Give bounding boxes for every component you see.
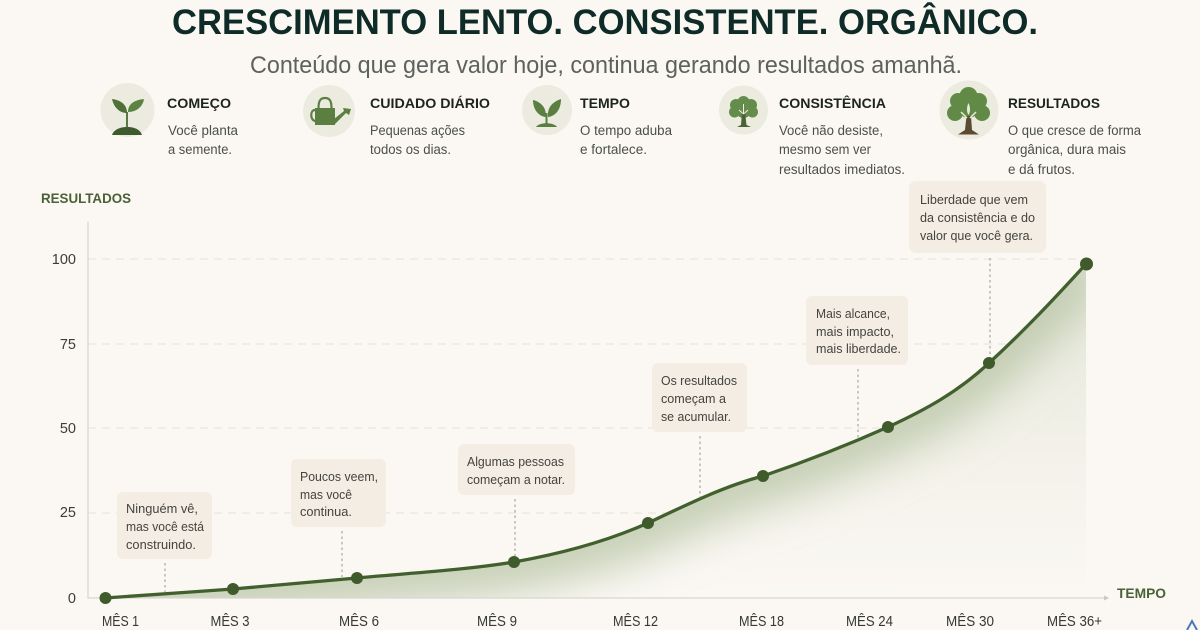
text: resultados: e dá frutos. bbox=[1008, 162, 1075, 177]
step: resultados bbox=[940, 80, 1141, 177]
x axis labels: MÊS 18 bbox=[739, 613, 784, 630]
y axis values: 75 bbox=[60, 337, 76, 353]
callout: month 9 bbox=[458, 444, 575, 495]
text: consistência bbox=[779, 123, 905, 177]
callout: month 24: Mais alcance, bbox=[816, 306, 890, 321]
y axis values: 25 bbox=[60, 505, 76, 521]
text: cuidado diário bbox=[370, 123, 465, 157]
text: resultados: orgânica, dura mais bbox=[1008, 142, 1126, 157]
callout: month 6: Poucos veem, bbox=[300, 469, 378, 484]
icon: watering can bbox=[303, 85, 355, 137]
callout: month 24: mais impacto, bbox=[816, 324, 894, 339]
callout: month 30: valor que você gera. bbox=[920, 228, 1033, 243]
text: resultados: O que cresce de forma bbox=[1008, 123, 1141, 138]
callout: month 30: da consistência e do bbox=[920, 210, 1035, 225]
icon: young plant bbox=[522, 85, 572, 135]
step: cuidado diário bbox=[303, 85, 490, 157]
callout: month 6: mas você bbox=[300, 487, 352, 502]
callout: month 30 bbox=[909, 181, 1046, 253]
heading: tempo: TEMPO bbox=[580, 95, 630, 111]
x axis labels: MÊS 1 bbox=[102, 613, 139, 630]
subtitle: Conteúdo que gera valor hoje, continua gerando resultados amanhã. bbox=[250, 52, 962, 79]
text: tempo bbox=[580, 123, 672, 157]
heading: resultados: RESULTADOS bbox=[1008, 95, 1100, 111]
heading: começo: COMEÇO bbox=[167, 95, 231, 111]
text: tempo: O tempo aduba bbox=[580, 123, 672, 138]
corner mark bbox=[1187, 621, 1197, 630]
step: consistência bbox=[719, 86, 905, 177]
text: consistência: Você não desiste, bbox=[779, 123, 883, 138]
heading: cuidado diário: CUIDADO DIÁRIO bbox=[370, 95, 490, 111]
text: cuidado diário: Pequenas ações bbox=[370, 123, 465, 138]
y axis values: 100 bbox=[52, 252, 76, 268]
text: começo: Você planta bbox=[168, 123, 238, 138]
callout: month 9: Algumas pessoas bbox=[467, 454, 564, 469]
text: começo bbox=[168, 123, 238, 157]
x axis labels bbox=[102, 613, 1102, 630]
callout: month 12 bbox=[652, 363, 747, 432]
callout: month 24 bbox=[806, 296, 908, 365]
x axis labels: MÊS 3 bbox=[210, 613, 250, 630]
text: tempo: e fortalece. bbox=[580, 142, 647, 157]
callout: month 1: Ninguém vê, bbox=[126, 501, 198, 516]
data points bbox=[100, 258, 1093, 604]
callout: month 9: começam a notar. bbox=[467, 472, 565, 487]
callout: month 6: continua. bbox=[300, 504, 352, 519]
x axis title: TEMPO bbox=[1117, 585, 1166, 601]
y axis values: 50 bbox=[60, 421, 76, 437]
step: tempo bbox=[522, 85, 672, 157]
callout: month 12: Os resultados bbox=[661, 373, 737, 388]
line chart bbox=[52, 222, 1109, 630]
callout: month 30: Liberdade que vem bbox=[920, 192, 1028, 207]
x axis labels: MÊS 30 bbox=[946, 613, 994, 630]
area under curve bbox=[138, 270, 1086, 598]
callout: month 12: se acumular. bbox=[661, 409, 731, 424]
y axis title: RESULTADOS bbox=[41, 190, 131, 206]
callout: month 1: construindo. bbox=[126, 537, 196, 552]
text: cuidado diário: todos os dias. bbox=[370, 142, 451, 157]
text: consistência: mesmo sem ver bbox=[779, 142, 871, 157]
connector lines bbox=[165, 258, 990, 592]
icon: small tree bbox=[719, 86, 768, 134]
text: consistência: resultados imediatos. bbox=[779, 162, 905, 177]
x axis labels: MÊS 24 bbox=[846, 613, 893, 630]
icon: sprout on soil bbox=[100, 83, 154, 137]
callout: month 6 bbox=[291, 459, 386, 527]
step: começo bbox=[100, 83, 238, 157]
y axis values bbox=[52, 252, 76, 607]
x axis labels: MÊS 36+ bbox=[1047, 613, 1102, 630]
x axis labels: MÊS 12 bbox=[613, 613, 658, 630]
growth curve bbox=[105, 264, 1086, 598]
text: começo: a semente. bbox=[168, 142, 232, 157]
icon: large tree bbox=[940, 80, 998, 140]
text: resultados bbox=[1008, 123, 1141, 177]
callout: month 24: mais liberdade. bbox=[816, 341, 901, 356]
axes bbox=[88, 222, 1109, 600]
title: CRESCIMENTO LENTO. CONSISTENTE. ORGÂNICO. bbox=[172, 2, 1038, 42]
heading: consistência: CONSISTÊNCIA bbox=[779, 94, 886, 111]
callout: month 1 bbox=[117, 492, 212, 559]
callout: month 12: começam a bbox=[661, 391, 727, 406]
y axis values: 0 bbox=[68, 591, 76, 607]
x axis labels: MÊS 9 bbox=[477, 613, 517, 630]
x axis labels: MÊS 6 bbox=[339, 613, 379, 630]
callout: month 1: mas você está bbox=[126, 519, 205, 534]
